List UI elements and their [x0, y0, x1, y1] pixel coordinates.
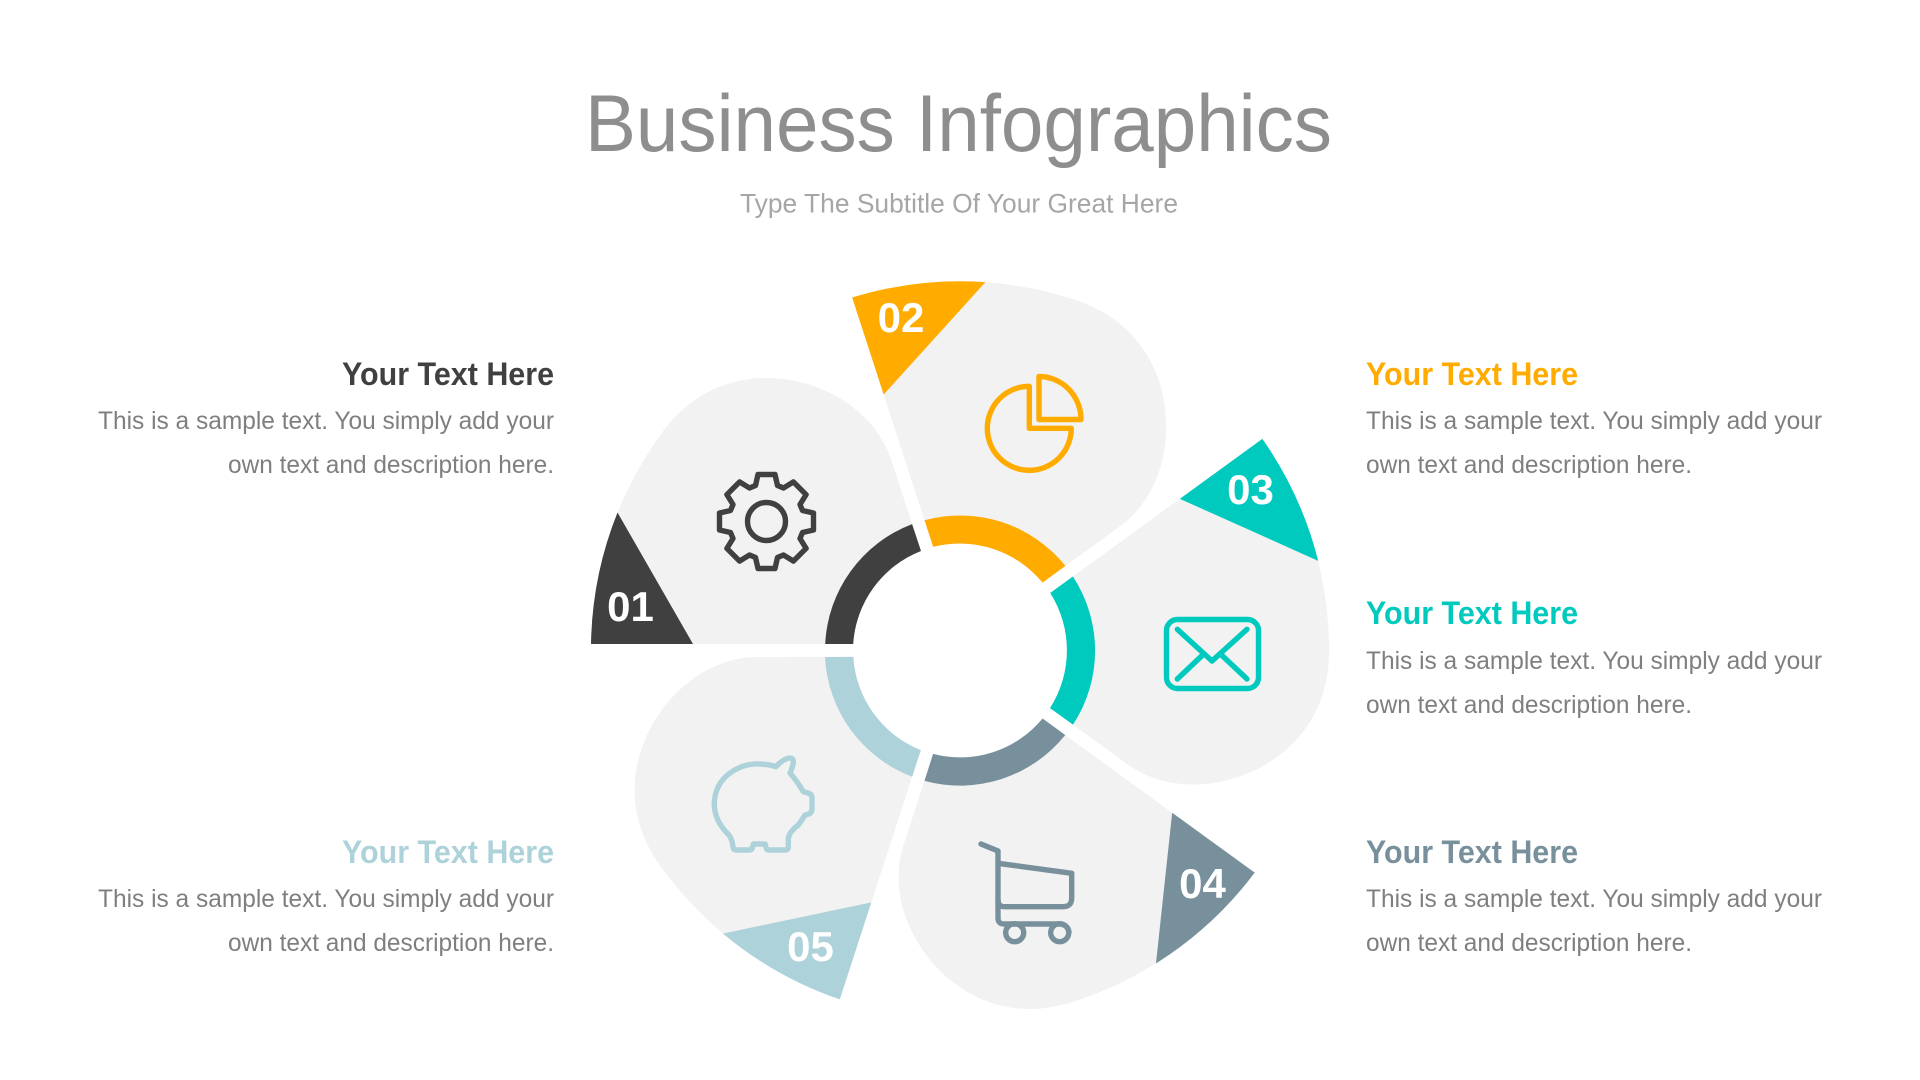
number 01: 01 [607, 583, 654, 630]
body 02: This is a sample text. You simply add your [1366, 407, 1822, 435]
body 03: own text and description here. [1366, 691, 1692, 719]
icon: gear [720, 474, 814, 568]
heading 05: Your Text Here [342, 834, 554, 870]
heading 01: Your Text Here [342, 356, 554, 392]
text block: 01 [98, 356, 554, 479]
heading 04: Your Text Here [1366, 834, 1578, 870]
body 04: own text and description here. [1366, 929, 1692, 957]
panel: petal 05 [587, 603, 942, 999]
body 02 [1366, 407, 1822, 479]
body 05: This is a sample text. You simply add your [98, 885, 554, 913]
body 03: This is a sample text. You simply add your [1366, 647, 1822, 675]
body 01: This is a sample text. You simply add your [98, 407, 554, 435]
body 02: own text and description here. [1366, 451, 1692, 479]
petal 03 shapes [995, 439, 1419, 848]
panel: petal 03 [995, 439, 1419, 848]
number 02: 02 [878, 294, 924, 341]
body 03 [1366, 647, 1822, 719]
number 03: 03 [1227, 466, 1274, 513]
petal 04 shapes [831, 679, 1255, 1080]
number 05: 05 [787, 923, 834, 970]
panel: petal 01 [591, 378, 921, 644]
text block: 03 [1366, 595, 1822, 719]
icon: piggy bank [714, 758, 812, 850]
body 04: This is a sample text. You simply add your [1366, 885, 1822, 913]
subtitle: Type The Subtitle Of Your Great Here [740, 188, 1178, 218]
panel: petal 02 [852, 215, 1207, 611]
number 04: 04 [1179, 860, 1226, 907]
text block: 02 [1366, 356, 1822, 479]
body 01 [98, 407, 554, 479]
icon: pie chart [987, 376, 1081, 470]
heading 03: Your Text Here [1366, 595, 1578, 631]
body 05: own text and description here. [228, 929, 554, 957]
panel: petal 04 [831, 679, 1255, 1080]
petal 02 shapes [852, 215, 1207, 611]
text block: 05 [98, 834, 554, 957]
icon: shopping cart [981, 844, 1072, 942]
title: Business Infographics [585, 79, 1332, 169]
body 01: own text and description here. [228, 451, 554, 479]
icon: envelope [1166, 620, 1258, 688]
petal 01 shapes [591, 378, 921, 644]
petal 05 shapes [587, 603, 942, 999]
heading 02: Your Text Here [1366, 356, 1578, 392]
body 05 [98, 885, 554, 957]
body 04 [1366, 885, 1822, 957]
text block: 04 [1366, 834, 1822, 957]
